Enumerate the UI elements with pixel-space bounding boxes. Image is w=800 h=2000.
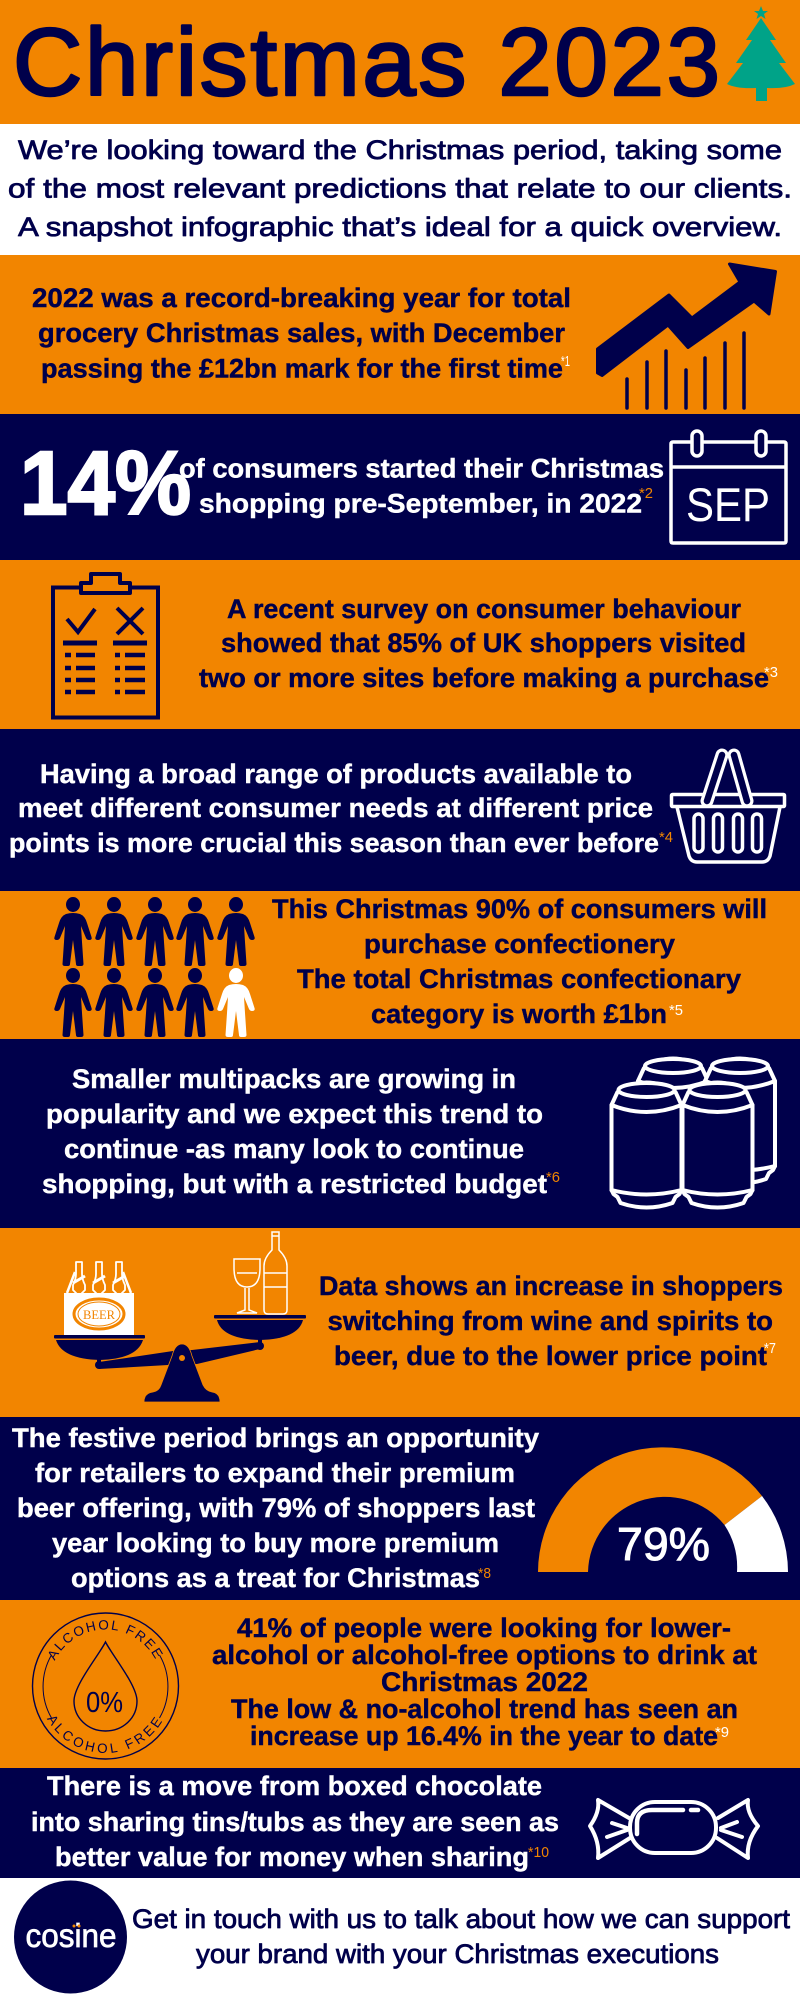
- icon: calendar: [671, 431, 786, 543]
- intro text: [8, 135, 792, 242]
- icon: alcohol free stamp: ALCOHOL FREE: [46, 1716, 162, 1753]
- text: premium beer: [12, 1423, 539, 1593]
- text: survey: showed that 85% of UK shoppers visited: [221, 628, 746, 658]
- text: premium beer: The festive period brings an opportunity: [12, 1423, 539, 1453]
- text: beer switching: Data shows an increase in shoppers: [319, 1271, 783, 1301]
- text: product range: Having a broad range of products available to: [40, 759, 632, 789]
- icon: alcohol free stamp: 0%: [86, 1687, 123, 1719]
- stat: 14 percent: 14%: [20, 434, 191, 534]
- logo: cosine: [14, 1880, 127, 1994]
- icon: wrapped sweet: [590, 1800, 758, 1858]
- text: record sales: 2022 was a record-breaking year for total: [32, 283, 571, 313]
- text: confectionery: The total Christmas confectionary: [297, 964, 741, 994]
- text: low and no alcohol: alcohol or alcohol-free options to drink at: [212, 1640, 757, 1670]
- footnote 6: *6: [546, 1169, 560, 1186]
- text: call to action: Get in touch with us to talk about how we can support: [132, 1904, 791, 1934]
- text: early shopping: shopping pre-September, in 2022: [199, 488, 642, 518]
- text: survey: two or more sites before making a purchase: [199, 663, 769, 693]
- text: call to action: [132, 1904, 791, 1969]
- text: beer switching: [319, 1271, 783, 1371]
- beer pack: BEER: [83, 1307, 115, 1322]
- icon: clipboard checklist: [53, 574, 158, 718]
- panel: title banner: [0, 0, 800, 124]
- text: confectionery: [272, 894, 767, 1029]
- wine glass and bottle: [234, 1232, 287, 1314]
- text: premium beer: year looking to buy more premium: [52, 1528, 499, 1558]
- text: premium beer: options as a treat for Christmas: [71, 1563, 480, 1593]
- text: survey: A recent survey on consumer behaviour: [227, 594, 741, 624]
- icon: four cans: [612, 1058, 775, 1208]
- text: early shopping: of consumers started their Christmas: [179, 454, 664, 484]
- beer pack: [64, 1262, 134, 1335]
- text: multipacks: popularity and we expect this trend to: [46, 1099, 543, 1129]
- text: low and no alcohol: 41% of people were looking for lower-: [237, 1613, 731, 1643]
- panel: multipacks: [0, 1039, 800, 1228]
- panel: introduction: [0, 124, 800, 255]
- text: call to action: your brand with your Christmas executions: [196, 1939, 719, 1969]
- text: confectionery: purchase confectionery: [364, 929, 675, 959]
- panel: survey: [0, 560, 800, 729]
- footnote 9: *9: [715, 1724, 729, 1741]
- footnote 10: *10: [528, 1844, 549, 1861]
- icon: shopping basket: [672, 755, 784, 862]
- text: sharing tins: better value for money when sharing: [55, 1842, 529, 1872]
- intro text: We’re looking toward the Christmas period, taking some: [18, 135, 782, 165]
- footnote 8: *8: [478, 1565, 491, 1582]
- footnote 7: *7: [764, 1340, 776, 1357]
- text: low and no alcohol: [212, 1613, 757, 1751]
- panel: sharing tins: [0, 1768, 800, 1878]
- text: survey: [199, 594, 769, 693]
- panel: contact footer: [0, 1878, 800, 2000]
- text: beer switching: switching from wine and spirits to: [328, 1306, 773, 1336]
- text: premium beer: beer offering, with 79% of shoppers last: [17, 1493, 535, 1523]
- footnote 2: *2: [639, 485, 653, 502]
- panel: product range: [0, 729, 800, 891]
- text: product range: meet different consumer needs at different price: [18, 793, 653, 823]
- logo: cosine: cosine: [26, 1917, 116, 1954]
- text: sharing tins: There is a move from boxed chocolate: [47, 1771, 542, 1801]
- footnote 5: *5: [669, 1002, 683, 1019]
- text: product range: [9, 759, 659, 858]
- icon: ten people: [54, 897, 255, 1037]
- panel: low and no alcohol: [0, 1600, 800, 1768]
- footnote 1: *1: [561, 353, 570, 370]
- footnote 4: *4: [659, 829, 673, 846]
- text: record sales: grocery Christmas sales, with December: [38, 318, 565, 348]
- panel: premium beer: [0, 1417, 800, 1600]
- text: multipacks: shopping, but with a restricted budget: [42, 1169, 547, 1199]
- text: sharing tins: into sharing tins/tubs as they are seen as: [31, 1807, 559, 1837]
- chart: 79 percent gauge: 79%: [617, 1518, 710, 1570]
- chart: 79 percent gauge: [538, 1447, 788, 1572]
- panel: early shopping: [0, 414, 800, 560]
- text: beer switching: beer, due to the lower price point: [334, 1341, 767, 1371]
- title: Christmas 2023: [13, 9, 720, 116]
- text: low and no alcohol: The low & no-alcohol trend has seen an: [231, 1694, 738, 1724]
- icon: balance scale with beer and wine: [54, 1232, 306, 1402]
- text: product range: points is more crucial this season than ever before: [9, 828, 659, 858]
- intro text: A snapshot infographic that’s ideal for a quick overview.: [18, 212, 782, 242]
- panel: beer vs wine: [0, 1228, 800, 1417]
- icon: alcohol free stamp: [32, 1612, 180, 1760]
- text: confectionery: This Christmas 90% of consumers will: [272, 894, 767, 924]
- footnote 3: *3: [764, 664, 778, 681]
- panel: confectionery: [0, 891, 800, 1039]
- intro text: of the most relevant predictions that relate to our clients.: [8, 174, 792, 204]
- text: confectionery: category is worth £1bn: [371, 999, 667, 1029]
- text: record sales: passing the £12bn mark for the first time: [41, 354, 563, 384]
- text: low and no alcohol: increase up 16.4% in the year to date: [250, 1721, 718, 1751]
- scale: [54, 1315, 306, 1402]
- text: multipacks: [42, 1064, 547, 1199]
- icon: alcohol free stamp: ALCOHOL FREE: [48, 1620, 163, 1661]
- text: multipacks: Smaller multipacks are growing in: [72, 1064, 516, 1094]
- text: multipacks: continue -as many look to continue: [64, 1134, 524, 1164]
- icon: christmas tree: [727, 6, 795, 101]
- icon: rising arrow and bars: [598, 264, 776, 408]
- icon: calendar: SEP: [686, 478, 770, 531]
- panel: record grocery sales: [0, 255, 800, 414]
- text: record sales: [32, 283, 571, 384]
- text: early shopping: [179, 454, 664, 518]
- text: sharing tins: [31, 1771, 559, 1872]
- text: premium beer: for retailers to expand their premium: [35, 1458, 515, 1488]
- text: low and no alcohol: Christmas 2022: [381, 1667, 588, 1697]
